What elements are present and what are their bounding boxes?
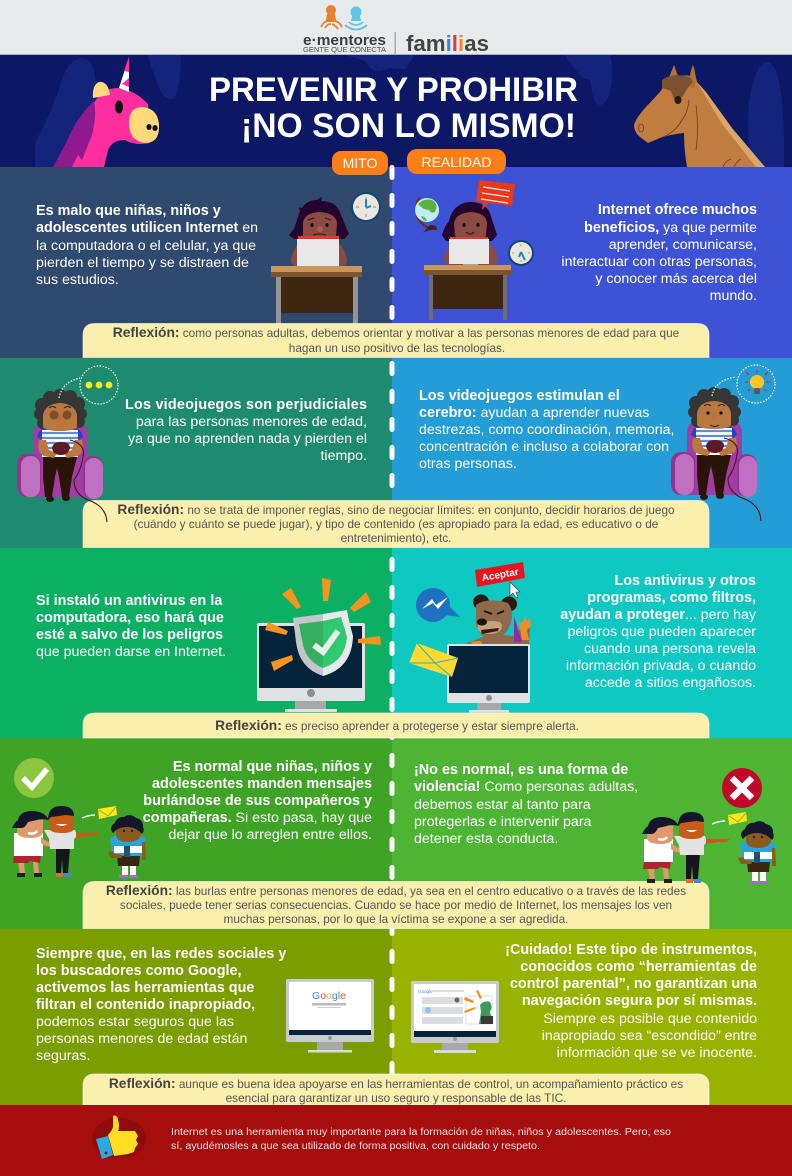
icon: x circle	[722, 768, 762, 808]
panel: realidad 3	[392, 548, 792, 738]
reflexión box 4: muchas personas, por lo que la víctima se expone a ser agredida.	[224, 912, 568, 926]
text: realidad 2	[419, 388, 674, 472]
icon: thumbs up	[92, 1116, 146, 1159]
icon: speech bubble	[476, 180, 515, 210]
footer band	[0, 1105, 792, 1176]
reflexión box 5: esencial para garantizar un uso seguro y responsable de las TIC.	[226, 1091, 566, 1105]
panel: realidad 1	[392, 167, 792, 358]
reflexión box 3	[83, 713, 709, 738]
panel: realidad 5	[392, 929, 792, 1105]
title: prevenir y prohibir: ¡NO SON LO MISMO!	[241, 107, 576, 145]
reflexión box 3: Reflexión: es preciso aprender a protegerse y estar siempre alerta.	[215, 718, 579, 733]
text: mito 1: pierden el tiempo y se distraen de	[36, 255, 249, 271]
text: mito 5: seguras.	[36, 1048, 90, 1064]
text: realidad 4: debemos estar al tanto para	[414, 797, 591, 813]
reflexión box 2: Reflexión: no se trata de imponer reglas, sino de negociar límites: en conjunto, decidir horarios de juego	[117, 502, 675, 517]
text: realidad 2: concentración e incluso a colaborar con	[419, 439, 669, 455]
icon: monitor	[447, 644, 530, 712]
text: mito 1: sus estudios.	[36, 272, 119, 288]
text: realidad 5: información que se ve inocente.	[557, 1045, 757, 1061]
reflexión box 1: Reflexión: como personas adultas, debemos orientar y motivar a las personas menores de edad para que	[113, 325, 680, 340]
icon: messenger bubble	[416, 588, 460, 622]
text: mito 4: dejar que lo arreglen entre ellos.	[169, 827, 372, 843]
text: mito 4: adolescentes manden mensajes	[152, 776, 372, 792]
text: realidad 1: beneficios, ya que permite	[584, 220, 757, 236]
title band	[0, 55, 792, 167]
text: realidad 5: control parental”, no garantizan una	[510, 976, 758, 992]
logo: familias: familias	[406, 31, 489, 56]
icon: globe	[415, 197, 439, 233]
text: conclusión: sí, ayudémosles a que sea utilizado de forma positiva, con cuidado y respeto.	[171, 1141, 540, 1152]
label: realidad	[407, 149, 506, 174]
icon: children teasing	[12, 806, 146, 878]
icon: unicorn	[53, 57, 159, 167]
text: mito 2: tiempo.	[320, 448, 367, 464]
text: mito 4: Es normal que niñas, niños y	[173, 759, 372, 775]
reflexión box 2: entretenimiento), etc.	[341, 531, 451, 545]
text: realidad 1: interactuar con otras personas,	[561, 254, 757, 270]
text: conclusión	[171, 1127, 671, 1152]
text: mito 1: adolescentes utilicen Internet en	[36, 220, 258, 236]
text: mito 4: burlándose de sus compañeros y	[143, 793, 372, 809]
text: realidad 3	[560, 573, 757, 691]
panel: realidad 2	[392, 358, 792, 548]
title: prevenir y prohibir: PREVENIR Y PROHIBIR	[209, 71, 578, 109]
text: realidad 4: detener esta conducta.	[414, 831, 558, 847]
text: realidad 5: inapropiado sea “escondido” entre	[542, 1028, 757, 1044]
decorative dashed divider	[390, 168, 394, 1100]
text: mito 3: computadora, eso hará que	[36, 610, 224, 626]
text: mito 5: podemos estar seguros que las	[36, 1014, 234, 1030]
text: mito 4	[143, 759, 372, 843]
icon: children teasing, right	[642, 812, 776, 884]
text: realidad 1: aprender, comunicarse,	[609, 237, 757, 253]
logo: e-mentores	[303, 5, 386, 54]
text: mito 3: que pueden darse en Internet.	[36, 644, 226, 660]
text: mito 1: Es malo que niñas, niños y	[36, 203, 221, 219]
panel: mito 4	[0, 738, 392, 929]
button: aceptar	[475, 562, 525, 598]
text: realidad 4	[414, 762, 638, 847]
text: conclusión: Internet es una herramienta muy importante para la formación de niñas, niños y adolescentes. Pero, eso	[171, 1127, 671, 1138]
text: realidad 1: Internet ofrece muchos	[598, 202, 757, 218]
text: realidad 4: protegerlas e intervenir para	[414, 814, 592, 830]
icon: thought bubble with dots	[59, 366, 118, 404]
reflexión box 1	[83, 324, 709, 358]
icon: shield with check	[293, 610, 353, 676]
icon: monitor with google: Google	[312, 990, 346, 1002]
logo: e-mentores: e·mentores	[303, 32, 386, 49]
icon: check circle	[14, 758, 54, 798]
text: mito 3	[36, 593, 226, 660]
text: realidad 3: ayudan a proteger... pero hay	[560, 607, 757, 623]
icon: gamer in armchair	[17, 389, 103, 502]
logo: e-mentores: GENTE QUE CONECTA	[303, 47, 386, 54]
text: mito 5: activemos las herramientas que	[36, 980, 254, 996]
panel: realidad 4	[392, 738, 792, 929]
text: realidad 1: mundo.	[710, 288, 757, 304]
icon: gamer in armchair	[671, 387, 757, 500]
text: mito 4: compañeras. Si esto pasa, hay que	[143, 810, 372, 826]
text: mito 3: esté a salvo de los peligros	[36, 627, 223, 643]
label: realidad: REALIDAD	[421, 154, 492, 170]
text: mito 5: Siempre que, en las redes sociales y	[36, 946, 286, 962]
reflexión box 1: hagan un uso positivo de las tecnologías.	[289, 341, 505, 355]
text: realidad 5: conocidos como “herramientas de	[520, 959, 757, 975]
text: mito 3: Si instaló un antivirus en la	[36, 593, 223, 609]
reflexión box 4: Reflexión: las burlas entre personas menores de edad, ya sea en el centro educativo o a través de las redes	[106, 883, 686, 898]
icon: clock	[508, 240, 534, 266]
text: realidad 4: violencia! Como personas adultas,	[414, 779, 638, 795]
text: realidad 2: cerebro: ayudan a aprender nuevas	[419, 405, 649, 421]
text: realidad 3: Los antivirus y otros	[614, 573, 756, 589]
text: mito 2: para las personas menores de edad,	[136, 414, 367, 430]
text: mito 2	[125, 397, 367, 464]
panel: mito 5	[0, 929, 392, 1105]
icon: hyena	[465, 594, 531, 649]
reflexión box 5	[83, 1074, 709, 1105]
text: realidad 3: peligros que pueden aparecer	[567, 624, 756, 640]
text: mito 5: personas menores de edad están	[36, 1031, 247, 1047]
text: mito 1	[36, 203, 258, 288]
icon: monitor with search results: Google	[418, 989, 433, 994]
panel: mito 3	[0, 548, 392, 738]
header band	[0, 0, 792, 56]
panel: mito 1	[0, 167, 392, 358]
text: mito 5: filtran el contenido inapropiado,	[36, 997, 255, 1013]
text: realidad 5	[505, 942, 758, 1061]
text: realidad 5: Siempre es posible que contenido	[543, 1011, 757, 1027]
text: mito 2: ya que no aprenden nada y pierden el	[128, 431, 367, 447]
text: realidad 4: ¡No es normal, es una forma de	[414, 762, 628, 778]
text: mito 2: Los videojuegos son perjudiciales	[125, 397, 367, 413]
icon: thought bubble with light bulb	[712, 365, 775, 403]
label: mito	[332, 151, 388, 175]
icon: horse	[634, 65, 765, 167]
title: prevenir y prohibir	[209, 71, 578, 145]
icon: monitor with search results	[411, 981, 499, 1053]
text: realidad 3: cuando una persona revela	[584, 641, 756, 657]
text: mito 5: los buscadores como Google,	[36, 963, 242, 979]
text: realidad 2: Los videojuegos estimulan el	[419, 388, 620, 404]
icon: monitor	[257, 623, 365, 712]
icon: controller cable right	[724, 438, 761, 521]
button: aceptar: Aceptar	[481, 567, 520, 584]
panel: mito 2	[0, 358, 392, 548]
icon: worried girl at desk	[271, 197, 362, 325]
text: realidad 2: destrezas, como coordinación, memoria,	[419, 422, 674, 438]
reflexión box 2: (cuándo y cuánto se puede jugar), y tipo de contenido (es apropiado para la edad, es educativo o de	[134, 517, 659, 531]
text: realidad 3: información privada, o cuando	[566, 658, 756, 674]
text: realidad 3: programas, como filtros,	[587, 590, 756, 606]
text: realidad 3: accede a sitios engañosos.	[585, 675, 756, 691]
text: mito 5	[36, 946, 286, 1064]
icon: orange rays	[265, 578, 381, 671]
text: realidad 1: y conocer más acerca del	[595, 271, 757, 287]
icon: controller cable left	[70, 440, 107, 522]
reflexión box 2	[83, 500, 709, 548]
text: realidad 2: otras personas.	[419, 456, 517, 472]
reflexión box 4	[83, 882, 709, 928]
text: realidad 1	[561, 202, 757, 304]
icon: monitor with google	[286, 979, 374, 1052]
text: realidad 5: ¡Cuidado! Este tipo de instrumentos,	[505, 942, 757, 958]
icon: smiling girl at desk	[424, 202, 511, 320]
reflexión box 5: Reflexión: aunque es buena idea apoyarse en las herramientas de control, un acompañamiento práctico es	[109, 1076, 683, 1091]
label: mito: MITO	[343, 155, 377, 171]
icon: yellow envelope	[409, 643, 458, 677]
text: mito 1: la computadora o el celular, ya que	[36, 238, 256, 254]
reflexión box 4: sociales, puede tener serias consecuencias. Cuando se hace por medio de Internet, los mensajes los ven	[120, 898, 672, 912]
icon: clock	[351, 192, 381, 222]
text: realidad 5: navegación segura por sí mismas.	[522, 993, 757, 1009]
